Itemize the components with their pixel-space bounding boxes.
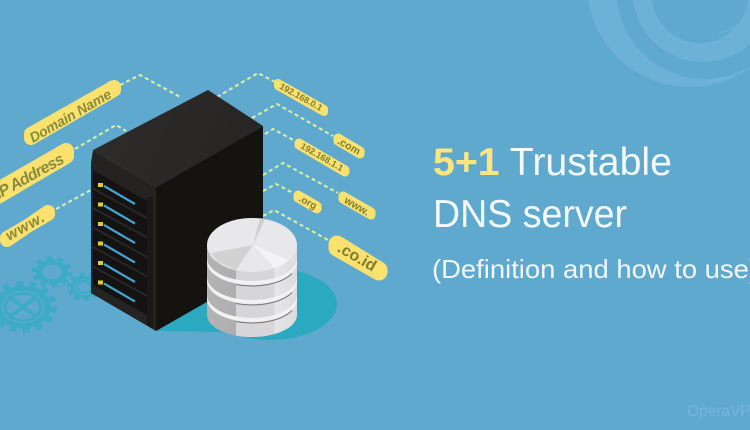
rack slot dividers <box>92 188 147 296</box>
gears <box>0 258 99 330</box>
title line 2: DNS server <box>433 193 627 236</box>
rack blue indicator bars <box>104 186 135 302</box>
label: .org: .org <box>297 193 318 212</box>
label: 192.168.0.1: 192.168.0.1 <box>278 81 324 113</box>
cylinder top face <box>207 218 297 272</box>
rack yellow LEDs <box>98 183 103 284</box>
label: www right: www. <box>341 194 372 218</box>
rack right face <box>156 126 263 331</box>
decorative rings top right <box>587 0 750 87</box>
rack top face <box>93 90 263 187</box>
gear: small top <box>34 258 70 286</box>
subtitle: (Definition and how to use) <box>432 254 750 284</box>
title line 1: 5+1 Trustable <box>433 141 672 184</box>
label: Domain Name: Domain Name <box>26 86 114 146</box>
label: www left: www. <box>3 209 48 244</box>
gear: small right <box>69 275 99 299</box>
server rack <box>91 90 263 331</box>
pie wedges on cylinder top <box>211 245 253 270</box>
rack front face <box>91 150 156 331</box>
cylinder body <box>207 245 297 337</box>
title <box>433 141 672 236</box>
gear: large <box>0 284 53 330</box>
teal floor shadow <box>156 268 337 340</box>
cylinder disc separators <box>207 258 297 323</box>
label: .com: .com <box>335 135 362 158</box>
label: 192.168.1.1: 192.168.1.1 <box>299 141 345 173</box>
database cylinder <box>207 218 297 337</box>
label: .co.id: .co.id <box>334 240 379 275</box>
dashed connector lines <box>56 73 338 240</box>
